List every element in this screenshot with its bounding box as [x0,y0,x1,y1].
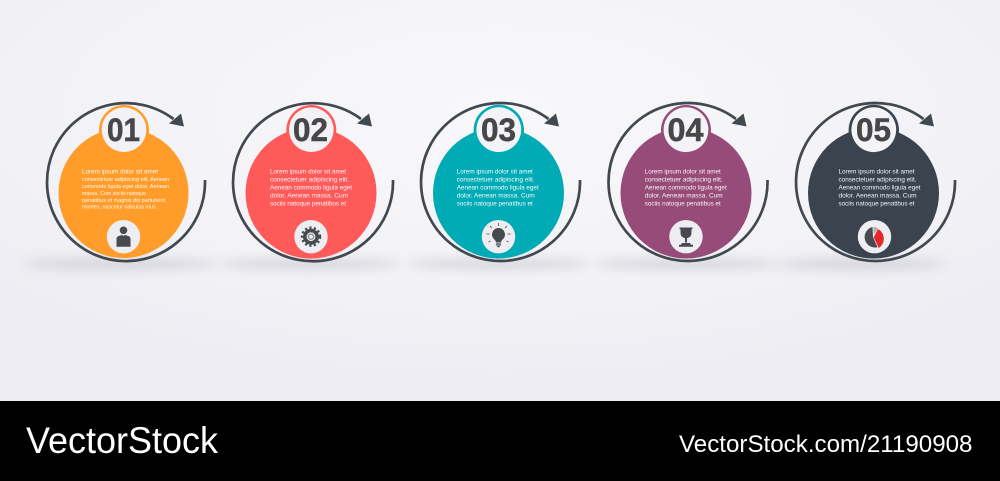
text block 01: commodo ligula eget dolor. Aenean [82,184,169,190]
footer image id: VectorStock.com/21190908 [679,431,972,458]
number 05: 05 [856,112,891,148]
badge ring 02 [286,105,336,155]
badge ring 04 [661,105,711,155]
text block 04: Aenean commodo ligula eget [645,184,727,192]
number 03: 03 [481,112,516,148]
panel: step 02 [233,103,393,261]
icon: person [107,220,140,253]
number 02: 02 [293,112,328,148]
text block 04 [645,168,727,208]
footer bar [0,401,1000,481]
text block 01: massa. Cum sociis natoque [82,191,146,197]
main circle 03 [433,128,564,258]
text block 05: consectetuer adipiscing elit. [838,176,917,184]
text block 03: Lorem ipsum dolor sit amet [457,168,533,176]
circular arrow 05 [796,103,955,261]
number 04: 04 [668,112,704,148]
icon: pie chart [858,220,891,253]
circular arrow 02 [233,103,393,261]
text block 03: dolor. Aenean massa. Cum [457,192,535,200]
text block 02: Aenean commodo ligula eget [270,184,352,192]
badge ring 05 [849,105,899,155]
circular arrow 04 [609,103,768,261]
text block 01: montes, nascetur ridiculus mus. [82,205,157,211]
text block 05: Lorem ipsum dolor sit amet [838,168,915,176]
icon: gear [294,220,328,253]
panel: step 01 [47,103,205,261]
circular arrow 01 [47,103,205,261]
badge 03 [476,107,521,152]
text block 04: Lorem ipsum dolor sit amet [645,168,721,176]
badge ring 01 [99,105,149,155]
text block 01: consectetuer adipiscing elit. Aenean [82,177,169,183]
badge 04 [664,107,708,152]
text block 04: sociis natoque penatibus et [645,200,721,208]
text block 02: sociis natoque penatibus et [270,200,346,208]
text block 04: dolor. Aenean massa. Cum [645,192,723,200]
panel: step 05 [796,103,955,261]
circular arrow 03 [421,103,580,261]
text block 01: Lorem ipsum dolor sit amet [82,168,158,176]
main circle 01 [58,128,188,258]
text block 04: consectetuer adipiscing elit. [645,176,723,184]
badge 05 [851,107,896,152]
text block 05 [838,168,921,208]
text block 02: Lorem ipsum dolor sit amet [270,168,346,176]
text block 03: consectetuer adipiscing elit. [457,176,535,184]
text block 05: sociis natoque penatibus et [838,200,915,208]
main circle 02 [246,128,376,258]
badge ring 03 [474,105,524,155]
text block 01: penatibus et magnis dis parturient [82,198,165,204]
icon: trophy [669,220,703,253]
main circle 05 [808,128,939,258]
text block 05: dolor. Aenean massa. Cum [838,192,917,200]
badge 02 [289,107,334,152]
text block 03: sociis natoque penatibus et [457,200,533,208]
text block 05: Aenean commodo ligula eget [838,184,921,192]
text block 02: dolor. Aenean massa. Cum [270,192,348,200]
footer logo: VectorStock [26,420,218,461]
floor shadows [22,258,946,270]
icon: light bulb [482,220,515,253]
text block 01 [82,168,169,211]
badge 01 [102,107,146,152]
main circle 04 [620,128,752,258]
text block 02 [270,168,352,208]
number 01: 01 [107,112,140,148]
text block 03: Aenean commodo ligula eget [457,184,539,192]
panel: step 03 [421,103,580,261]
text block 03 [457,168,539,208]
panel: step 04 [609,103,768,261]
text block 02: consectetuer adipiscing elit. [270,176,349,184]
